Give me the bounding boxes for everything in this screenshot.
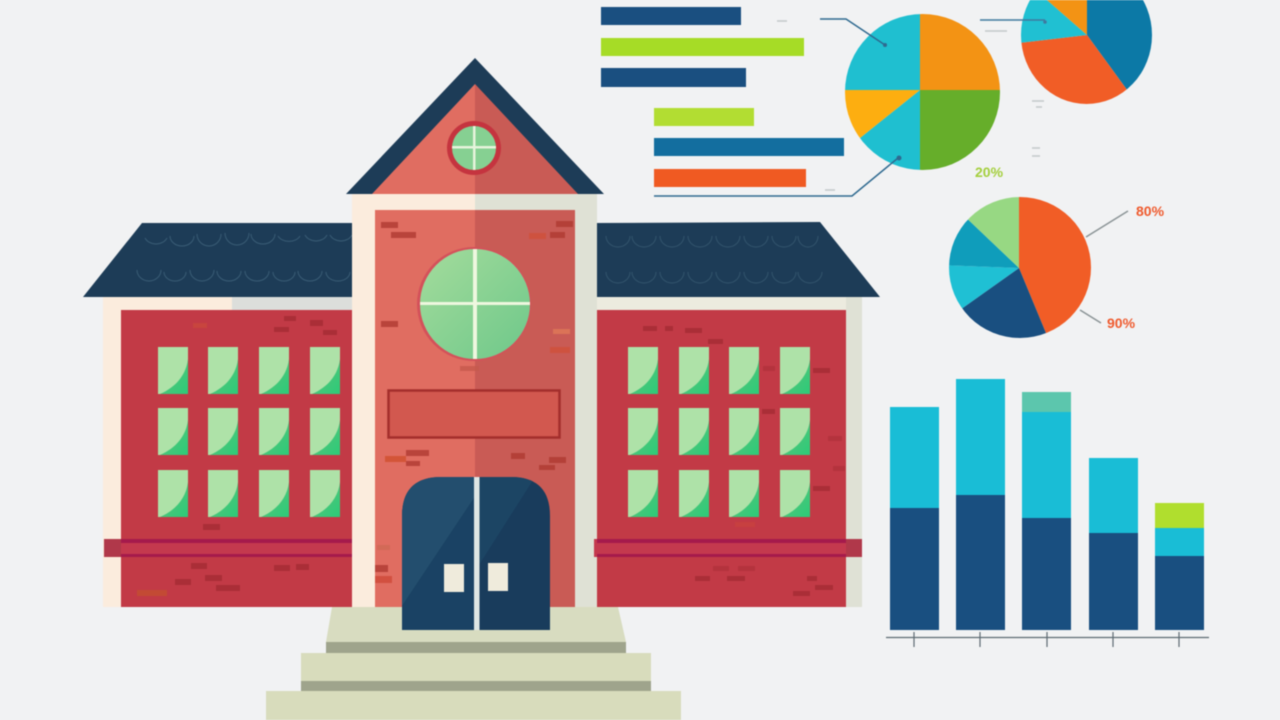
tower sign panel [388,390,560,438]
bar 2 [956,379,1005,630]
wing bricks [137,316,845,596]
school building [83,58,880,720]
right wing roof [597,222,880,297]
large round window [417,247,531,361]
bar 3 [1022,392,1071,630]
leader line: lower pie to bars [654,156,902,196]
small grey marks [777,21,1044,190]
bar 4 [1089,458,1138,630]
label: orange percentage lower: 90% [1107,315,1136,331]
pie chart: top right [1020,0,1153,105]
tower bricks [375,221,573,583]
horizontal bars [601,7,844,187]
entrance steps [266,607,681,720]
leader lines: middle pie [1080,211,1128,323]
left wing roof [83,223,352,297]
stacked bar chart [886,379,1209,647]
label: green percentage: 20% [975,164,1004,180]
bar 1 [890,407,939,630]
tower roof [346,58,604,194]
axis [886,632,1209,647]
leader line: top pie [820,19,887,47]
pie chart: top centre [844,13,1001,171]
bar 5 [1155,503,1204,630]
right band overlap [594,539,597,557]
tower wall [352,194,597,607]
left wing windows [158,347,340,517]
right wing windows [628,347,810,517]
label: orange percentage upper: 80% [1136,203,1165,219]
pie chart: middle right [948,196,1092,339]
left wing wall [103,297,352,607]
double door [402,477,550,630]
right wing wall [597,297,862,607]
leader line: top right pie [980,20,1047,24]
round gable window [447,121,501,175]
